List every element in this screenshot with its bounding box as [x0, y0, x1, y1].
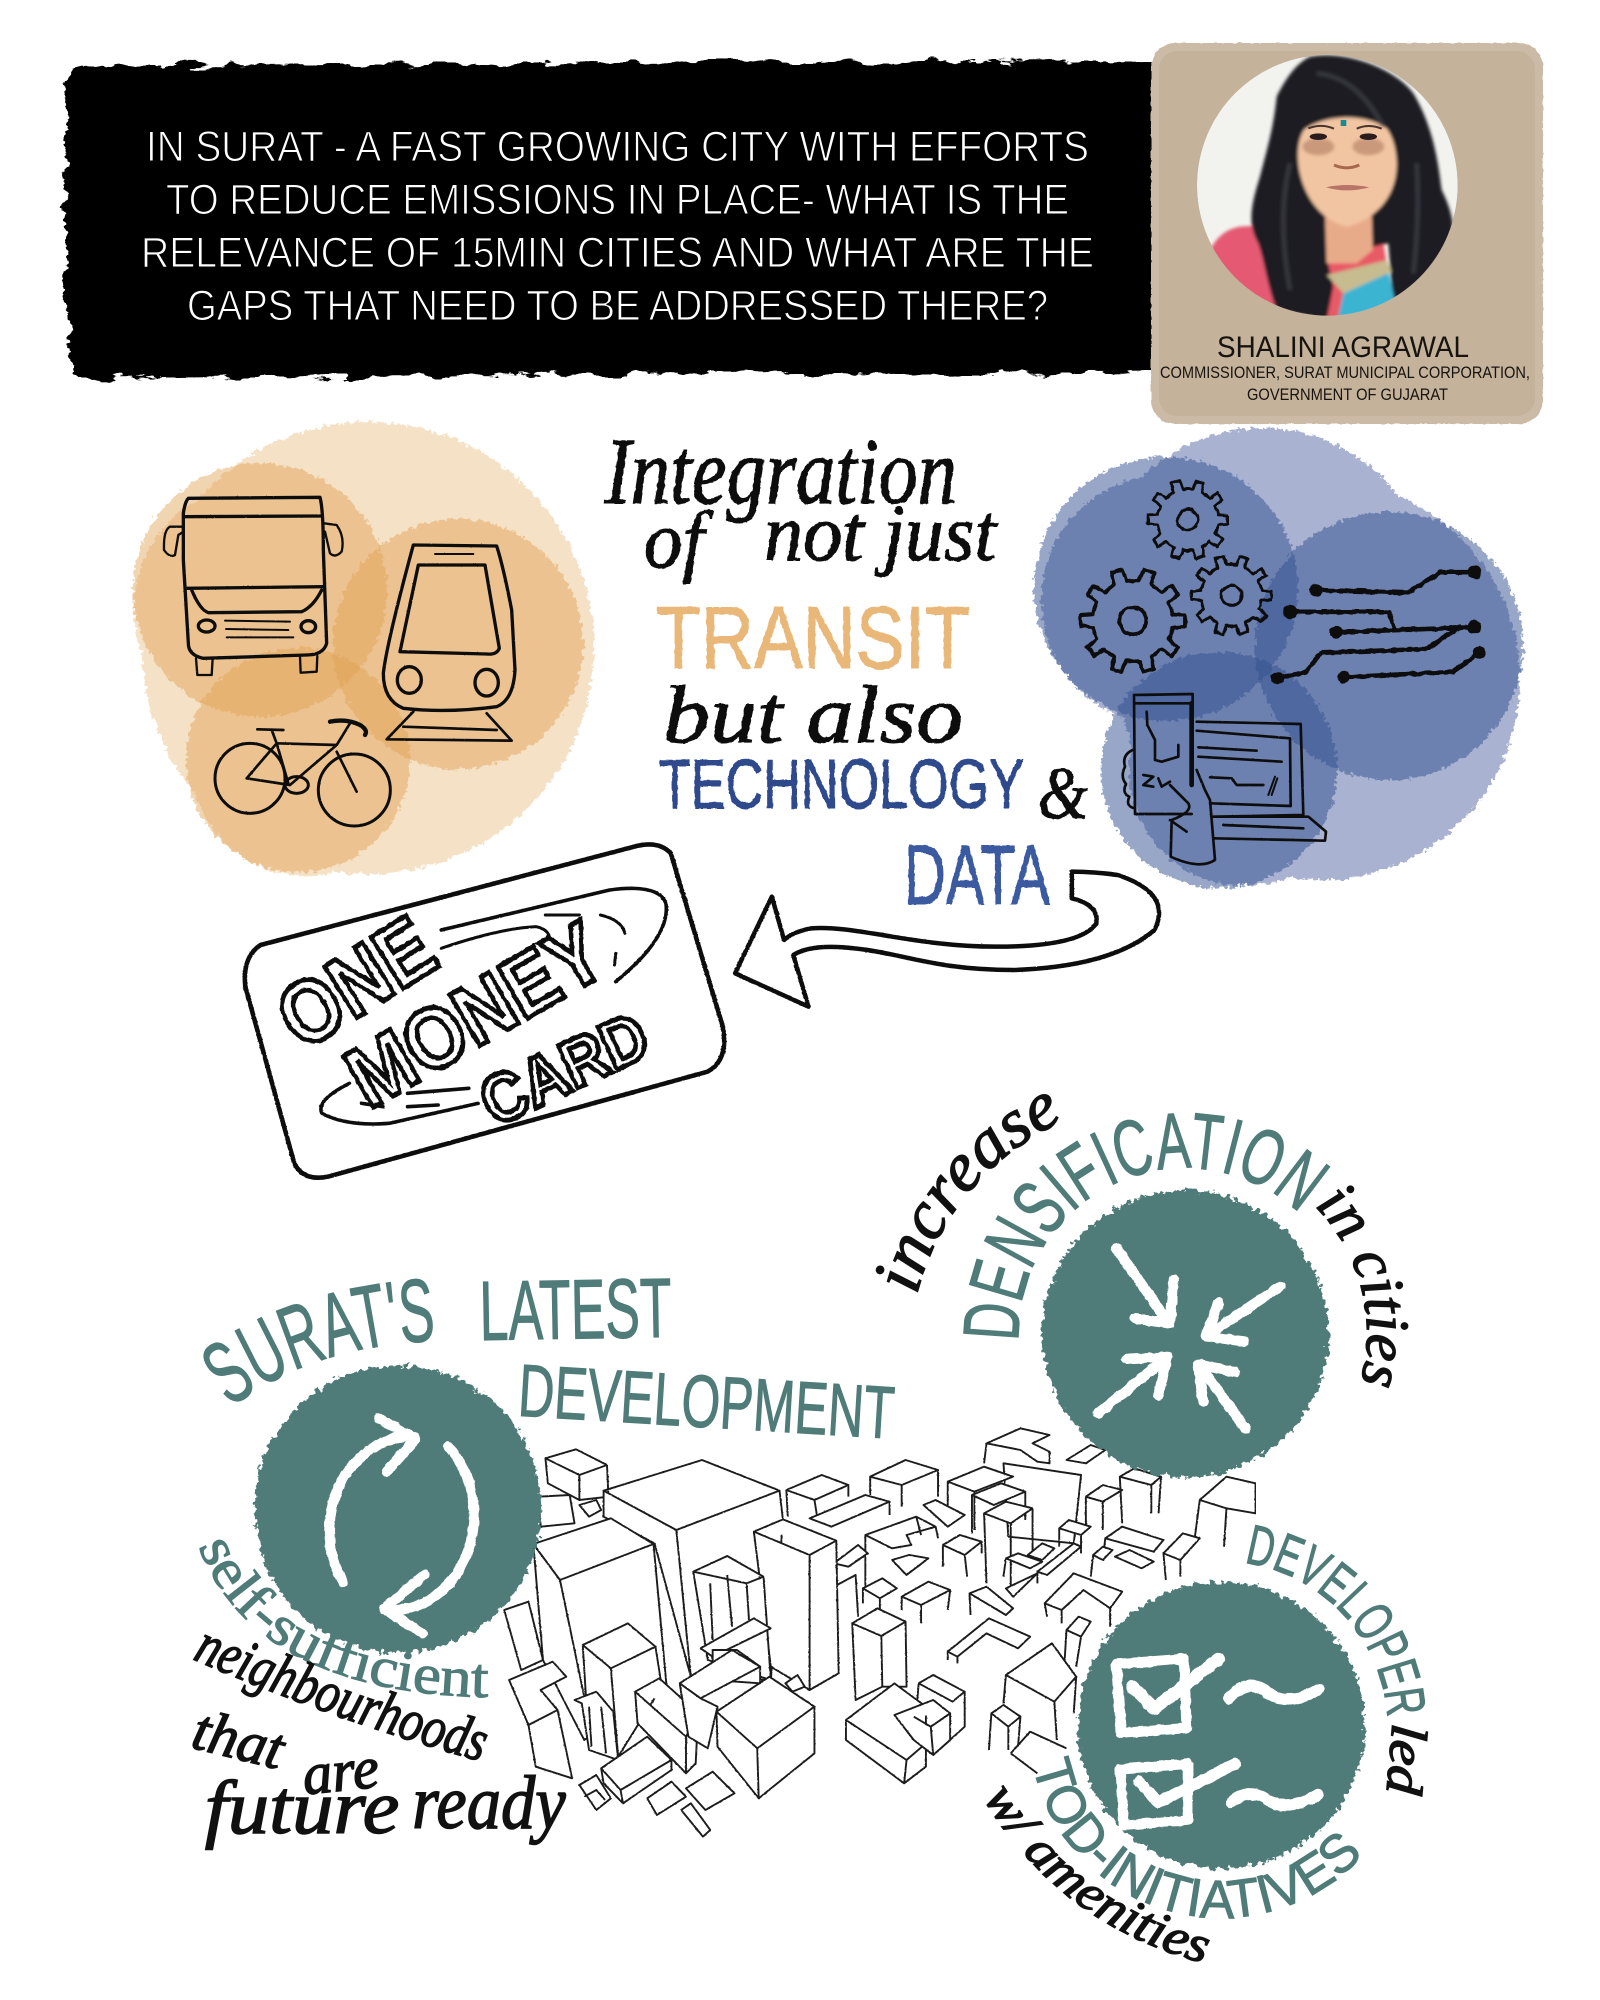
icon: checklist items — [1116, 1659, 1318, 1825]
question banner — [64, 60, 1165, 378]
portrait photo — [1197, 55, 1458, 323]
banner question text: RELEVANCE OF 15MIN CITIES AND WHAT ARE THE — [141, 229, 1094, 277]
icon: bus — [164, 497, 343, 675]
text: increase densification in cities: in cities — [1316, 1185, 1408, 1388]
text: increase densification in cities — [876, 1094, 1408, 1388]
icon: circuit lines — [1271, 565, 1486, 685]
heading: integration of not just transit but also technology and data: Integration — [604, 420, 957, 524]
arrow from data to card — [735, 872, 1159, 1007]
icon: tram — [383, 545, 515, 741]
text: increase densification in cities: DENSIFICATION — [963, 1112, 1330, 1338]
banner question text: IN SURAT - A FAST GROWING CITY WITH EFFORTS — [146, 123, 1089, 171]
card text: CARD — [468, 998, 660, 1141]
panel: self-sufficient neighbourhoods — [186, 1261, 897, 1850]
heading: integration of not just transit but also technology and data: TRANSIT — [656, 588, 970, 687]
card background — [1151, 43, 1543, 424]
heading: integration of not just transit but also technology and data — [604, 420, 1088, 922]
card text: MONEY — [330, 903, 621, 1126]
speaker name and role: GOVERNMENT OF GUJARAT — [1247, 386, 1448, 404]
heading: integration of not just transit but also technology and data: TECHNOLOGY — [659, 745, 1024, 823]
banner question text — [141, 123, 1094, 330]
card outline and swooshes — [245, 844, 724, 1178]
speaker name and role: COMMISSIONER, SURAT MUNICIPAL CORPORATION, — [1160, 364, 1530, 382]
text: self-sufficient neighbourhoods that are future ready: self-sufficient — [199, 1540, 488, 1698]
heading: surat's latest development: DEVELOPMENT — [516, 1349, 897, 1455]
panel: blue technology blobs — [1034, 428, 1523, 888]
text: developer led TOD initiatives with amenities: led — [1375, 1722, 1437, 1797]
icon: circular arrows — [329, 1418, 474, 1633]
orange pale blob — [134, 422, 594, 876]
speaker name and role: SHALINI AGRAWAL — [1217, 331, 1469, 364]
transit icons — [164, 497, 515, 826]
icon: phone, hand and laptop — [1123, 694, 1326, 864]
icon: gears — [1081, 479, 1271, 674]
panel: speaker card — [1151, 43, 1543, 424]
text: developer led TOD initiatives with amenities — [986, 1524, 1437, 1962]
banner question text: GAPS THAT NEED TO BE ADDRESSED THERE? — [187, 282, 1048, 330]
card inner tone — [1159, 51, 1535, 416]
panel: densification — [876, 1094, 1408, 1480]
text: self-sufficient neighbourhoods that are future ready: are — [299, 1735, 382, 1807]
card text: ONE — [260, 896, 452, 1068]
circle: checklist — [1078, 1582, 1364, 1869]
heading: surat's latest development: SURAT'S — [203, 1278, 433, 1402]
orange circles — [133, 463, 583, 872]
city buildings sketch — [504, 1428, 1256, 1837]
text: increase densification in cities: increase — [876, 1094, 1059, 1292]
technology icons — [1081, 479, 1486, 685]
text: developer led TOD initiatives with amenities: w/ amenities — [986, 1784, 1210, 1962]
text: self-sufficient neighbourhoods that are future ready: future — [205, 1765, 399, 1850]
heading: integration of not just transit but also technology and data: of — [644, 497, 713, 585]
icon: bicycle — [215, 721, 390, 826]
panel: developer led TOD — [986, 1524, 1437, 1962]
text: developer led TOD initiatives with amenities: TOD-INITIATIVES — [1036, 1755, 1359, 1919]
banner question text: TO REDUCE EMISSIONS IN PLACE- WHAT IS THE — [166, 176, 1069, 224]
text: developer led TOD initiatives with amenities: DEVELOPER — [1246, 1524, 1426, 1716]
text: self-sufficient neighbourhoods that are future ready: that — [186, 1697, 292, 1782]
blue circles — [1034, 457, 1523, 888]
heading: integration of not just transit but also technology and data: & — [1038, 753, 1088, 835]
icon: four inward arrows — [1098, 1248, 1280, 1428]
text: self-sufficient neighbourhoods that are future ready: ready — [412, 1760, 567, 1845]
banner torn black background — [64, 60, 1165, 378]
heading: integration of not just transit but also technology and data: DATA — [904, 828, 1050, 922]
one money card — [245, 844, 724, 1178]
heading: integration of not just transit but also technology and data: not just — [764, 490, 998, 578]
heading: surat's latest development: LATEST — [479, 1261, 672, 1358]
heading: integration of not just transit but also technology and data: but also — [663, 669, 963, 760]
text: self-sufficient neighbourhoods that are future ready — [186, 1540, 567, 1850]
blue pale blob — [1041, 428, 1520, 886]
circle: recycle — [255, 1366, 541, 1652]
speaker name and role — [1160, 331, 1530, 404]
heading: surat's latest development — [203, 1261, 897, 1455]
panel: orange transit blobs — [133, 422, 594, 876]
text: self-sufficient neighbourhoods that are future ready: neighbourhoods — [192, 1634, 488, 1760]
circle: converging arrows — [1042, 1190, 1329, 1477]
